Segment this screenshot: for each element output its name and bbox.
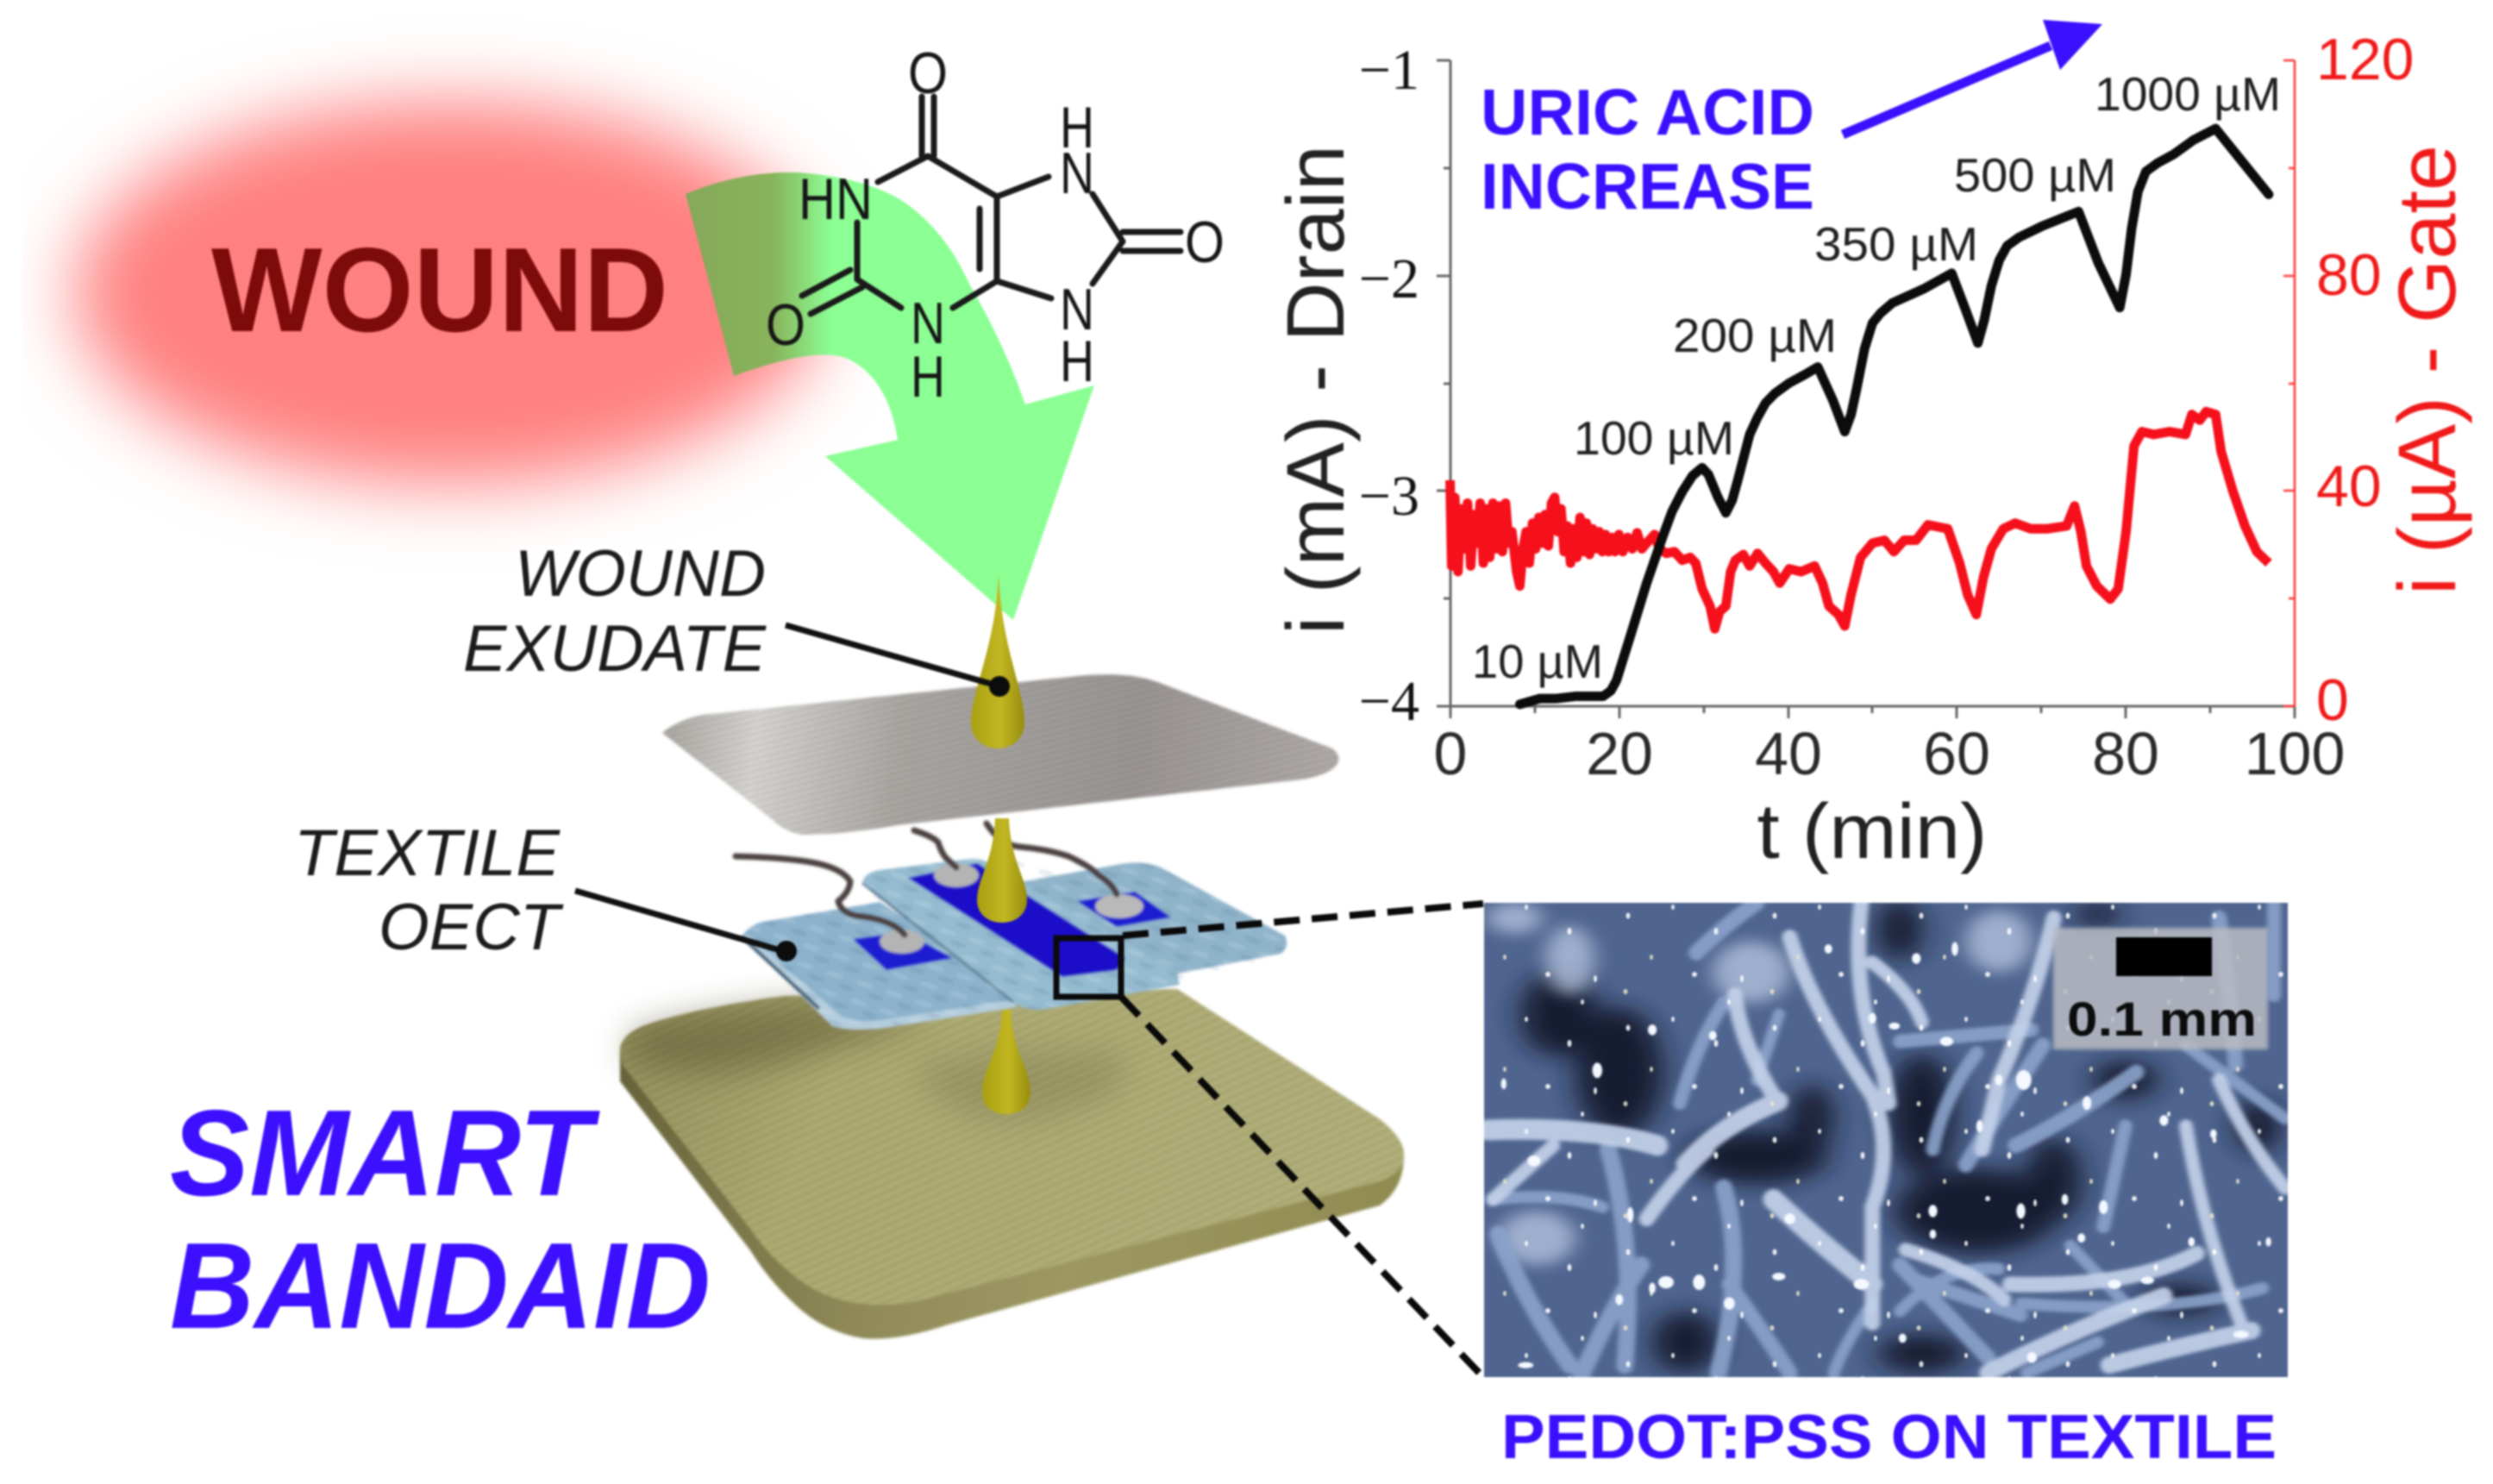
molecule atoms: O [766,292,805,358]
drain current tick labels: −1 [1359,39,1419,102]
wound area: blurred red ellipse [75,102,825,485]
gate current tick labels: 40 [2316,454,2382,519]
micrograph: PEDOT:PSS on textile [1484,899,2288,1377]
concentration labels [1472,67,2281,688]
micrograph fibres [1488,903,2285,1377]
label: textile OECT: TEXTILE [294,817,561,890]
label: uric acid increase: URIC ACID [1481,76,1814,148]
blue gate pad [853,932,953,970]
leader line: wound exudate [786,625,1010,697]
OECT right textile piece [966,862,1287,978]
drain current tick labels: −3 [1359,465,1419,528]
uric acid molecule [766,41,1225,410]
arrow: increasing concentration [1843,20,2102,135]
molecule bonds [802,97,1181,314]
micrograph glitter [1484,903,2288,1377]
time tick labels: 40 [1755,720,1822,787]
heading: smart bandaid: BANDAID [170,1218,711,1355]
right axis and ticks [2283,60,2295,706]
right axis title: i (µA) - Gate [2382,145,2473,595]
dashed zoom lines [1121,904,1483,1377]
gate current trace (red) [1450,411,2269,629]
heading: smart bandaid: SMART [170,1085,600,1222]
top drop [971,573,1024,748]
gate current tick labels: 80 [2316,242,2382,308]
lower drop [982,1010,1030,1114]
silver contacts [880,930,924,954]
chart: uric acid response [1270,20,2473,875]
middle drop [977,818,1027,923]
caption: PEDOT:PSS on textile: PEDOT:PSS ON TEXTILE [1501,1403,2277,1472]
drain current tick labels: −4 [1359,670,1419,733]
gate current tick labels: 0 [2316,667,2349,733]
label: wound exudate: EXUDATE [463,612,767,686]
molecule atoms: H [911,344,945,410]
molecule atoms: N [1060,277,1094,342]
OECT centre textile strip [862,859,1180,1010]
label: wound exudate: WOUND [515,537,766,611]
molecule atoms: HN [799,166,873,232]
leader line: textile OECT [575,891,797,961]
molecule atoms: O [1185,210,1225,275]
blue PEDOT channel [908,863,1125,977]
time tick labels: 0 [1434,720,1467,787]
inset square on channel [1056,938,1121,997]
gate current tick labels [2316,27,2414,733]
wires [736,823,1117,935]
concentration labels: 500 µM [1954,148,2116,202]
label: textile OECT: OECT [379,891,564,964]
time tick labels: 20 [1586,720,1653,787]
molecule atoms [766,41,1225,410]
drain current trace (black) [1519,128,2269,704]
drain current tick labels: −2 [1359,247,1419,310]
concentration labels: 100 µM [1574,411,1734,465]
scale bar [2053,928,2268,1049]
time tick labels: 60 [1923,720,1990,787]
time tick labels: 80 [2092,720,2159,787]
green curved arrow from wound to exudate drop [686,172,1094,620]
title: WOUND: WOUND [211,223,668,357]
drain current tick labels [1359,39,1419,733]
concentration labels: 1000 µM [2095,67,2281,121]
concentration labels: 200 µM [1673,309,1837,362]
absorbent pad (bottom layer) [620,989,1404,1339]
concentration labels: 350 µM [1814,217,1978,271]
label: textile OECT [294,817,564,964]
OECT textile mottling [742,859,1287,1030]
molecule atoms: H [1060,95,1094,160]
concentration labels: 10 µM [1472,635,1603,688]
micrograph sparkles [1501,942,2271,1368]
OECT left textile piece [742,902,1035,1030]
textile OECT device [736,823,1287,1030]
micrograph hazy highlights [1488,903,2032,1265]
time tick labels: 100 [2245,720,2345,787]
left axis and ticks [1437,60,1450,706]
gate current tick labels: 120 [2316,27,2414,92]
scale bar: 0.1 mm [2067,992,2257,1046]
x axis title: t (min) [1757,789,1987,875]
label: uric acid increase [1481,76,1814,222]
blue contact pad [1077,892,1171,927]
label: wound exudate [463,537,767,686]
molecule atoms: N [911,291,945,356]
left axis title: i (mA) - Drain [1270,145,1362,635]
molecule atoms: H [1060,329,1094,394]
time tick labels [1434,720,2345,787]
molecule atoms: N [1060,141,1094,206]
heading: smart bandaid [170,1085,711,1355]
breathable sheet (top layer) [662,674,1338,835]
micrograph dark background patches [1520,899,2279,1373]
bottom axis and ticks [1450,706,2295,718]
label: uric acid increase: INCREASE [1481,150,1814,222]
molecule atoms: O [908,41,948,106]
